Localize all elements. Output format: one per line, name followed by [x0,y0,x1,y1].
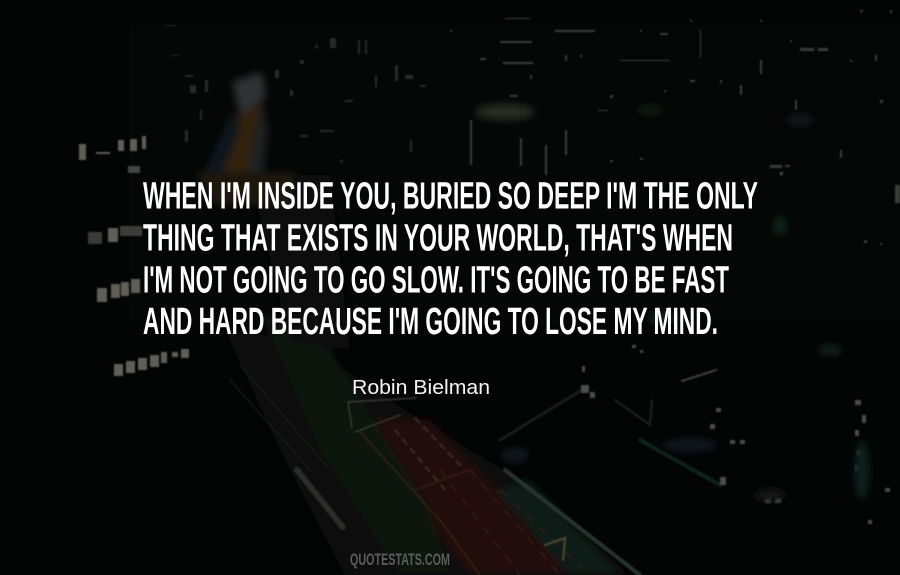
source watermark: QUOTESTATS.COM [350,550,450,569]
road and greenery [195,72,630,575]
road markings [230,365,720,575]
building windows, left [79,136,189,376]
quote text [143,176,758,343]
green glow clusters [475,104,870,501]
author: Robin Bielman [352,377,490,399]
city light speckles [165,10,900,524]
